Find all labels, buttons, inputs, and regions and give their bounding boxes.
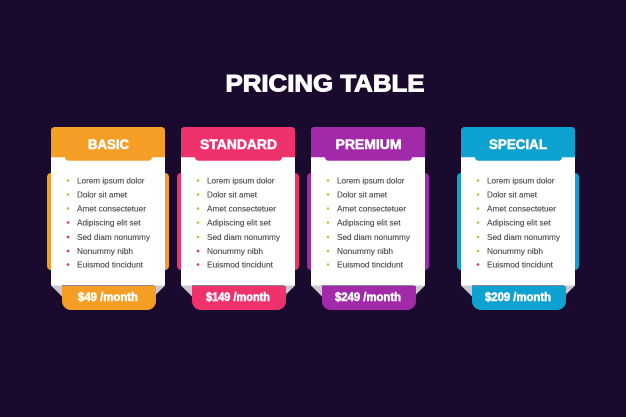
header bbox=[461, 127, 575, 161]
feature list: Dolor sit amet bbox=[207, 190, 258, 200]
feature list: Lorem ipsum dolor bbox=[337, 176, 405, 186]
feature list: Adipiscing elit set bbox=[337, 218, 401, 228]
header bbox=[181, 127, 295, 161]
plan name: BASIC bbox=[88, 137, 129, 152]
feature list: Nonummy nibh bbox=[77, 247, 133, 256]
feature list: Amet consectetuer bbox=[337, 204, 406, 214]
card body bbox=[181, 127, 295, 286]
panel: special plan bbox=[457, 127, 579, 310]
feature list: Amet consectetuer bbox=[207, 204, 276, 214]
plan name: SPECIAL bbox=[489, 137, 547, 152]
feature list: Adipiscing elit set bbox=[207, 218, 271, 228]
price tab bbox=[322, 286, 416, 310]
price: $209 /month bbox=[485, 292, 551, 304]
back band bbox=[457, 173, 579, 270]
feature list: Dolor sit amet bbox=[77, 190, 128, 200]
plan name: STANDARD bbox=[200, 137, 277, 152]
card body bbox=[51, 127, 165, 286]
feature list: Adipiscing elit set bbox=[487, 218, 551, 228]
header bbox=[51, 127, 165, 161]
back band bbox=[47, 173, 169, 270]
feature list bbox=[477, 176, 561, 270]
card body bbox=[311, 127, 425, 286]
feature list: Amet consectetuer bbox=[487, 204, 556, 214]
panel: standard plan bbox=[177, 127, 299, 310]
feature list: Dolor sit amet bbox=[337, 190, 388, 200]
feature list: Lorem ipsum dolor bbox=[77, 176, 145, 186]
panel: basic plan bbox=[47, 127, 169, 310]
price tab bbox=[472, 286, 566, 310]
feature list bbox=[197, 176, 281, 270]
price: $249 /month bbox=[335, 292, 401, 304]
back band bbox=[307, 173, 429, 270]
feature list: Euismod tincidunt bbox=[487, 260, 554, 270]
feature list: Lorem ipsum dolor bbox=[207, 176, 275, 186]
price tab bbox=[192, 286, 286, 310]
feature list: Euismod tincidunt bbox=[337, 260, 404, 270]
feature list: Sed diam nonummy bbox=[77, 233, 151, 242]
price: $149 /month bbox=[206, 292, 270, 304]
feature list: Adipiscing elit set bbox=[77, 218, 141, 228]
back band bbox=[177, 173, 299, 270]
feature list: Sed diam nonummy bbox=[337, 233, 411, 242]
feature list bbox=[327, 176, 411, 270]
price tab bbox=[62, 286, 156, 310]
price: $49 /month bbox=[78, 292, 138, 304]
fold shadows bbox=[181, 286, 295, 296]
feature list: Nonummy nibh bbox=[207, 247, 263, 256]
fold shadows bbox=[311, 286, 425, 296]
feature list: Sed diam nonummy bbox=[207, 233, 281, 242]
feature list: Lorem ipsum dolor bbox=[487, 176, 555, 186]
feature list: Sed diam nonummy bbox=[487, 233, 561, 242]
fold shadows bbox=[461, 286, 575, 296]
feature list: Amet consectetuer bbox=[77, 204, 146, 214]
feature list: Nonummy nibh bbox=[487, 247, 543, 256]
feature list: Dolor sit amet bbox=[487, 190, 538, 200]
fold shadows bbox=[51, 286, 165, 296]
feature list: Nonummy nibh bbox=[337, 247, 393, 256]
feature list: Euismod tincidunt bbox=[207, 260, 274, 270]
title: PRICING TABLE bbox=[226, 70, 424, 98]
card body bbox=[461, 127, 575, 286]
feature list bbox=[67, 176, 151, 270]
feature list: Euismod tincidunt bbox=[77, 260, 144, 270]
panel: premium plan bbox=[307, 127, 429, 310]
header bbox=[311, 127, 425, 161]
plan name: PREMIUM bbox=[336, 137, 402, 152]
